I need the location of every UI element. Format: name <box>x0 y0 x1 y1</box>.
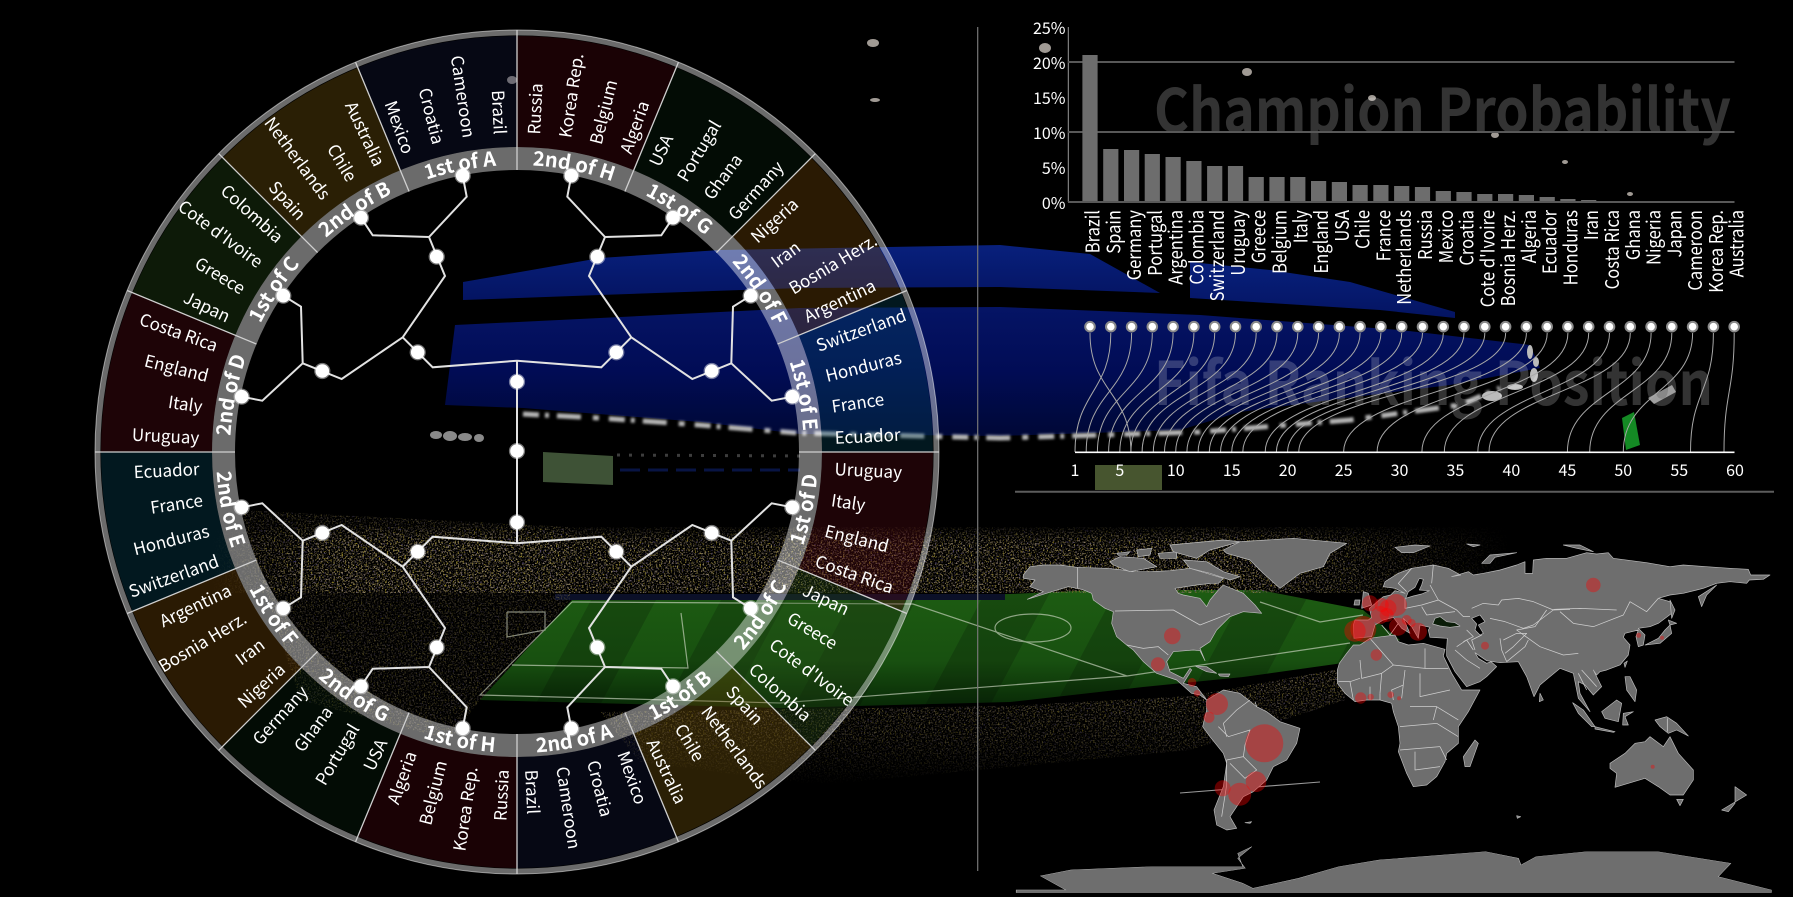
sector: 2nd of B: Chile <box>322 138 364 186</box>
sector: 2nd of H: Belgium <box>582 77 622 147</box>
ranking axis labels: 35 <box>1447 457 1464 481</box>
sector: 2nd of D: Italy <box>167 388 204 418</box>
sector: 1st of B: Australia <box>642 734 694 807</box>
sector: 2nd of G: 2nd of G <box>318 668 390 721</box>
slope chart: FIFA ranking position <box>1071 322 1744 481</box>
sector: 1st of D: England <box>822 517 892 557</box>
sector: 2nd of H: Korea Rep. <box>551 51 589 139</box>
sector: 2nd of E: Switzerland <box>125 547 222 603</box>
sector: 2nd of H <box>518 36 676 181</box>
sector: 1st of F: Argentina <box>155 577 235 632</box>
sector: 1st of A: 1st of A <box>424 151 496 180</box>
sector: 1st of E: Ecuador <box>834 421 901 449</box>
sector: 1st of E: Honduras <box>822 344 904 387</box>
sector: 1st of E: France <box>830 385 886 418</box>
sector: 2nd of E <box>101 452 246 610</box>
team labels: USA <box>1328 210 1355 242</box>
sector: 2nd of G: Portugal <box>308 718 364 789</box>
team labels: Ghana <box>1618 210 1646 260</box>
sector: 1st of H: Korea Rep. <box>445 765 483 853</box>
team labels: Colombia <box>1182 210 1210 285</box>
sector: 1st of G: 1st of G <box>646 184 713 234</box>
sector: 2nd of B: Netherlands <box>259 111 338 204</box>
sector: 1st of C: Cote d'Ivoire <box>174 193 269 273</box>
team labels: Honduras <box>1556 210 1584 285</box>
sector: 1st of A <box>358 36 516 180</box>
horizontal divider <box>1015 491 1774 493</box>
sector: 1st of D: Costa Rica <box>812 547 897 598</box>
sector: 2nd of B: Australia <box>340 97 392 170</box>
team labels: Netherlands <box>1390 210 1418 305</box>
team labels: Bosnia Herz. <box>1494 210 1521 306</box>
y axis tick labels <box>1033 15 1066 214</box>
team labels: Portugal <box>1140 210 1168 276</box>
sector: 1st of B <box>634 668 810 836</box>
sector: 1st of F: Nigeria <box>231 656 290 713</box>
team labels: Japan <box>1660 210 1688 257</box>
sector: 1st of A: Croatia <box>414 85 452 147</box>
sector: 2nd of F: Nigeria <box>744 191 803 248</box>
sector: 2nd of E: Honduras <box>130 517 212 560</box>
chart title: Champion Probability: Champion Probability <box>1154 63 1731 150</box>
background: stadium photograph <box>222 39 1676 794</box>
team labels: Germany <box>1120 209 1147 280</box>
sector: 2nd of D <box>101 294 244 452</box>
y axis tick labels: 25% <box>1033 15 1066 39</box>
sector: 2nd of E: 2nd of E <box>216 471 246 548</box>
y axis tick labels: 20% <box>1033 50 1066 74</box>
team labels: Cote d'Ivoire <box>1473 210 1501 307</box>
map: inland seas <box>1406 578 1485 635</box>
ranking axis labels: 50 <box>1614 457 1632 481</box>
sector: 2nd of A: 2nd of A <box>536 724 614 752</box>
sector: 2nd of G: Ghana <box>287 700 338 756</box>
sector: 1st of H: Belgium <box>412 757 452 827</box>
ranking axis labels: 20 <box>1279 457 1297 481</box>
sector: 2nd of G: Germany <box>246 679 313 750</box>
sector: 2nd of D: Costa Rica <box>137 306 222 357</box>
team labels: Chile <box>1348 210 1376 249</box>
sector: 1st of B: 1st of B <box>648 672 711 720</box>
team labels: Costa Rica <box>1598 210 1625 289</box>
sector: 1st of G: USA <box>642 129 678 170</box>
sector: 1st of C: Japan <box>180 284 235 327</box>
sector: 2nd of A: Cameroon <box>551 765 588 850</box>
sector: 1st of F <box>133 570 301 746</box>
vertical divider <box>977 27 979 871</box>
sector: 1st of G: Portugal <box>670 115 726 186</box>
sector: 2nd of F: Argentina <box>799 272 879 327</box>
sector: 1st of A: Mexico <box>380 97 422 157</box>
ranking axis labels: 1 <box>1071 457 1079 481</box>
sector: 2nd of C <box>734 570 883 746</box>
sector: 1st of F: 1st of F <box>250 584 299 642</box>
sector: 1st of B: Chile <box>670 718 712 766</box>
sector: 2nd of G <box>224 668 400 836</box>
team labels: Switzerland <box>1203 210 1231 301</box>
sector: 1st of A: Brazil <box>487 89 514 135</box>
tournament bracket lines and match nodes <box>235 169 799 735</box>
team labels: Croatia <box>1452 210 1480 266</box>
world map with probability bubbles <box>1016 538 1771 893</box>
team labels: Belgium <box>1265 210 1293 274</box>
ranking axis labels: 45 <box>1559 457 1576 481</box>
sector: 1st of D <box>790 452 933 610</box>
team labels: Uruguay <box>1224 209 1251 276</box>
sector: 2nd of G: USA <box>356 734 393 774</box>
sector: 1st of F: Iran <box>229 631 269 670</box>
team labels: Korea Rep. <box>1702 210 1729 293</box>
sector: 2nd of B: 2nd of B <box>318 182 390 238</box>
sector: 2nd of C: Cote d'Ivoire <box>765 631 860 711</box>
sector: 1st of A: Cameroon <box>446 54 483 139</box>
team labels: Brazil <box>1078 210 1106 253</box>
team labels: Australia <box>1722 210 1750 277</box>
y axis tick labels: 15% <box>1033 85 1066 109</box>
ranking axis labels <box>1071 457 1744 481</box>
y axis tick labels: 10% <box>1033 120 1066 144</box>
team labels: Argentina <box>1161 210 1189 285</box>
sector: 1st of E <box>790 294 933 452</box>
map: Antarctica <box>1016 847 1771 893</box>
team labels <box>1078 209 1750 307</box>
sector: 1st of H <box>358 726 516 868</box>
sector: 2nd of F: Bosnia Herz. <box>783 227 881 299</box>
sector: 2nd of C: Japan <box>799 577 854 620</box>
sector: 1st of B: Netherlands <box>696 700 775 793</box>
ranking axis labels: 55 <box>1670 457 1688 481</box>
sector: 1st of H: 1st of H <box>424 726 494 752</box>
team labels: Iran <box>1577 210 1605 240</box>
sector: 2nd of H: Russia <box>520 83 548 135</box>
map: Africa, Eurasia, Oceania <box>1337 544 1770 818</box>
team labels: Mexico <box>1431 210 1459 263</box>
sector: 2nd of H: 2nd of H <box>533 151 616 181</box>
sector: 1st of E: Switzerland <box>812 301 909 357</box>
ranking axis labels: 15 <box>1223 457 1241 481</box>
bracket wheel: round of 16 diagram <box>94 30 940 874</box>
sector: 2nd of F <box>732 158 901 334</box>
probability bubbles <box>1151 578 1664 806</box>
probability bars <box>1082 55 1659 202</box>
sector: 2nd of F: 2nd of F <box>732 254 788 322</box>
sector: 2nd of A: Brazil <box>520 769 547 815</box>
sector: 1st of H: Russia <box>486 769 514 821</box>
y axis tick labels: 0% <box>1042 190 1066 214</box>
team labels: Nigeria <box>1639 210 1667 265</box>
sector: 1st of H: Algeria <box>380 747 422 807</box>
sector: 2nd of C: Colombia <box>744 656 818 726</box>
sector: 2nd of C: 2nd of C <box>734 580 786 650</box>
team labels: Cameroon <box>1681 210 1708 291</box>
sector: 1st of D: Uruguay <box>834 455 903 483</box>
ranking axis labels: 40 <box>1503 457 1520 481</box>
chart title: Fifa Ranking Position: Fifa Ranking Position <box>1154 336 1713 423</box>
sector: 2nd of A: Mexico <box>612 747 654 807</box>
map: Americas and Arctic <box>1023 538 1347 830</box>
ranking axis labels: 25 <box>1335 457 1353 481</box>
team labels: Ecuador <box>1535 210 1563 274</box>
sector: 2nd of C: Greece <box>783 605 843 654</box>
sector: 2nd of D: Uruguay <box>131 421 200 449</box>
ranking axis labels: 30 <box>1391 457 1408 481</box>
sector: 1st of G <box>634 68 810 236</box>
ranking axis labels: 5 <box>1115 457 1124 481</box>
team labels: Greece <box>1244 210 1272 263</box>
ranking axis labels: 10 <box>1167 457 1185 481</box>
sector: 2nd of D: England <box>142 347 212 387</box>
team dots <box>1085 322 1739 332</box>
team labels: Italy <box>1286 209 1314 243</box>
sector: 1st of G: Germany <box>721 154 788 225</box>
team labels: England <box>1307 210 1334 273</box>
sector: 1st of C: Colombia <box>216 178 290 248</box>
y axis tick labels: 5% <box>1042 155 1066 179</box>
team labels: Spain <box>1099 210 1127 254</box>
sector: 1st of C: 1st of C <box>250 256 298 322</box>
sector: 1st of C: Greece <box>191 250 251 299</box>
sector: 2nd of B <box>224 68 400 238</box>
sector: 2nd of F: Iran <box>765 234 805 273</box>
sector: 1st of E: 1st of E <box>790 360 818 430</box>
sector: 1st of G: Ghana <box>696 148 747 204</box>
sector: 2nd of B: Spain <box>264 175 313 225</box>
sector: 2nd of E: Ecuador <box>133 455 200 483</box>
sector: 1st of B: Spain <box>721 679 770 729</box>
sector: 2nd of D: 2nd of D <box>216 355 244 436</box>
sector: 2nd of A <box>518 724 676 868</box>
ranking axis labels: 60 <box>1726 457 1744 481</box>
team labels: Russia <box>1411 210 1438 260</box>
team labels: France <box>1369 210 1397 261</box>
ranking connector curves <box>1075 333 1734 452</box>
sector: 1st of C <box>133 158 301 334</box>
sector: 2nd of E: France <box>148 486 204 519</box>
sector: 1st of D: 1st of D <box>790 475 816 544</box>
team labels: Algeria <box>1515 210 1542 263</box>
bar chart: champion probability <box>1033 15 1750 307</box>
map: country borders <box>1078 565 1667 817</box>
sector: 1st of F: Bosnia Herz. <box>153 605 251 677</box>
sector: 1st of D: Italy <box>830 486 867 516</box>
sector: 2nd of H: Algeria <box>612 97 654 157</box>
sector: 2nd of A: Croatia <box>582 757 620 819</box>
